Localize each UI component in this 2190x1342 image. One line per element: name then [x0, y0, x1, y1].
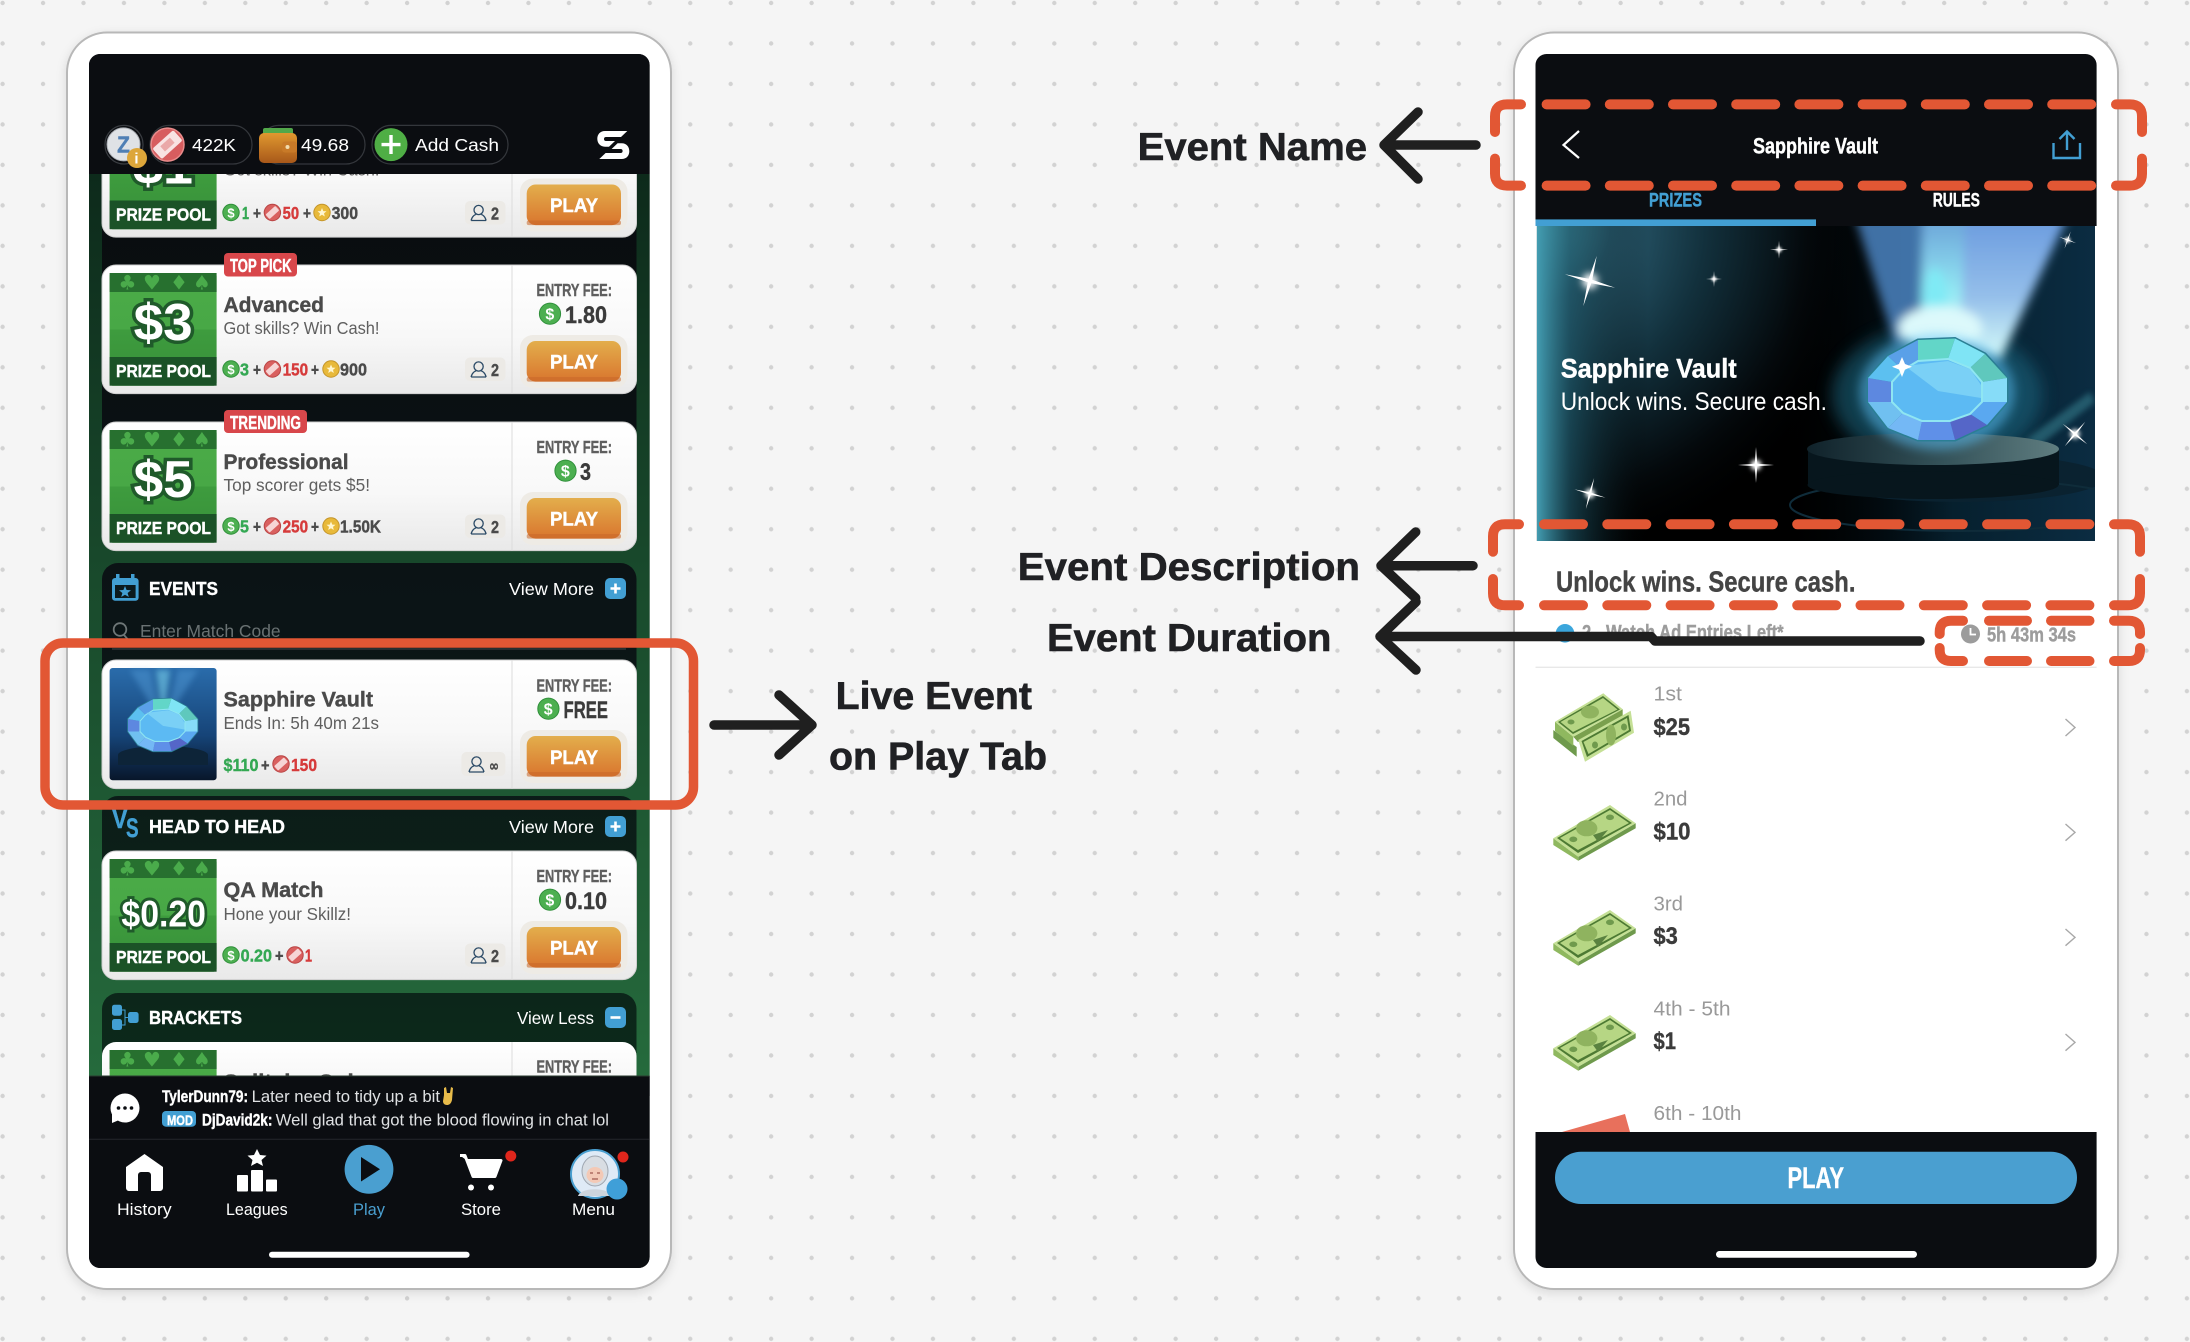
card: Advanced match: 1.80	[565, 302, 607, 329]
card: Sapphire Vault live event: ∞	[489, 757, 499, 775]
card: Professional match: +	[311, 518, 319, 537]
footer bar with play button: PLAY	[1788, 1162, 1844, 1195]
heading: events section: EVENTS	[149, 579, 218, 599]
card: Professional match: Top scorer gets $5!	[224, 475, 370, 495]
card: Advanced match: 900	[340, 360, 367, 380]
heading: brackets section	[112, 1005, 626, 1030]
card: Advanced match: ♣♥♦♠	[118, 270, 211, 294]
prize row: 4th to 5th: 4th - 5th	[1654, 998, 1730, 1020]
card: QA Match: $	[227, 948, 235, 963]
sparkles	[1558, 228, 2098, 513]
icon: share	[2054, 132, 2080, 158]
icon: skill coin: i	[134, 150, 139, 168]
card: one dollar match: 2	[491, 204, 499, 224]
card: QA Match: ENTRY FEE:	[536, 866, 612, 886]
match code search field	[112, 621, 626, 649]
nav item: Play: Play	[353, 1200, 385, 1219]
card: Advanced match: 150	[283, 360, 308, 380]
watch ad entries note: 2 - Watch Ad Entries Left*	[1582, 622, 1784, 644]
card: one dollar match: +	[253, 204, 261, 223]
card: bracket match, cut off: ENTRY FEE:	[536, 1057, 612, 1077]
arrow: to live event card label	[714, 695, 812, 755]
card: Advanced match: $	[227, 362, 235, 377]
card: Professional match	[102, 422, 636, 551]
hero banner: Sapphire Vault	[1561, 353, 1737, 383]
card: Sapphire Vault live event: Ends In: 5h 40m 21s	[224, 713, 379, 733]
nav item: Menu with avatar: Menu	[572, 1200, 615, 1219]
card: one dollar match: $1	[133, 138, 193, 196]
card: Professional match: $	[561, 464, 570, 481]
icon: chat bubble	[110, 1094, 140, 1123]
heading: brackets section: BRACKETS	[149, 1008, 242, 1028]
nav item: Leagues	[226, 1149, 288, 1219]
highlight box: event description	[1493, 524, 2140, 605]
card: Professional match: ENTRY FEE:	[536, 437, 612, 457]
prize row: 6th to 10th	[1562, 1103, 1742, 1132]
card: Professional match: 3	[580, 459, 591, 486]
icon: back chevron	[1564, 131, 1579, 158]
nav item: History	[117, 1154, 172, 1219]
prize row: 2nd: 2nd	[1654, 789, 1688, 811]
heading: events section	[112, 574, 626, 601]
chat message one: TylerDunn79:	[162, 1088, 248, 1106]
heading: head to head section: View More	[509, 817, 594, 837]
top status bar: 422K	[192, 135, 236, 155]
highlight box: event name	[1495, 104, 2142, 186]
card: Sapphire Vault live event: FREE	[564, 697, 608, 724]
chat message one: Later need to tidy up a bit	[252, 1088, 440, 1106]
icon: wallet	[259, 128, 297, 163]
highlight box: live event card	[45, 643, 694, 805]
card: bracket match, cut off: Solitaire Cube	[224, 1069, 374, 1094]
card: one dollar match: 300	[332, 203, 358, 223]
card: one dollar match: +	[303, 204, 311, 223]
top status bar: 49.68	[301, 135, 349, 155]
hero banner	[1537, 216, 2130, 541]
card: bracket match, cut off	[102, 1042, 636, 1110]
card: Professional match: ♣♥♦♠	[118, 428, 211, 452]
event duration timer: 5h 43m 34s	[1987, 624, 2076, 646]
card: bracket match, cut off: ♣♥♦♠	[118, 1048, 211, 1072]
prize row: 1st: 1st	[1654, 684, 1682, 706]
nav item: History: History	[117, 1200, 172, 1219]
arrow: event duration	[1380, 602, 1920, 670]
card: Advanced match: +	[311, 361, 319, 380]
chat message two: MOD	[167, 1113, 193, 1128]
card: QA Match: 1	[305, 946, 312, 966]
podium	[1790, 433, 2130, 531]
icon: skill coin: Z	[117, 132, 130, 158]
chat message two: DjDavid2k:	[202, 1112, 272, 1130]
top status bar	[89, 54, 650, 174]
chat message two: Well glad that got the blood flowing in chat lol	[276, 1112, 609, 1130]
nav item: Leagues: Leagues	[226, 1200, 288, 1219]
icon: skill coin	[107, 128, 147, 168]
event thumbnail	[110, 668, 217, 780]
card: QA Match: QA Match	[224, 877, 324, 902]
card: QA Match: 2	[491, 946, 499, 966]
card: Sapphire Vault live event: ENTRY FEE:	[536, 676, 612, 696]
card: Advanced match: PLAY	[550, 352, 598, 374]
prize row: 1st	[1553, 684, 2075, 762]
badge: trending	[224, 410, 307, 433]
card: QA Match: $	[545, 893, 554, 910]
card: Professional match: Professional	[224, 449, 348, 474]
prize row: 4th to 5th: $1	[1654, 1028, 1676, 1055]
heading: head to head section: S	[126, 813, 139, 843]
nav item: Menu with avatar	[571, 1150, 628, 1219]
prize row: 2nd	[1553, 789, 2075, 861]
prize row: 2nd: $10	[1654, 818, 1690, 845]
prize row: 3rd: $3	[1654, 923, 1678, 950]
arrow: event description	[1381, 532, 1473, 598]
card: QA Match: Hone your Skillz!	[224, 904, 351, 924]
heading: head to head section: HEAD TO HEAD	[149, 817, 285, 837]
card: one dollar match: 1	[242, 203, 249, 223]
hero banner: Unlock wins. Secure cash.	[1561, 388, 1827, 416]
card: Advanced match: ENTRY FEE:	[536, 280, 612, 300]
event header bar	[1536, 54, 2097, 226]
event description text: Unlock wins. Secure cash.	[1556, 567, 1856, 599]
card: Professional match: 5	[240, 517, 249, 537]
card: Advanced match: Advanced	[224, 292, 324, 317]
arrow: event name	[1384, 112, 1476, 179]
card: Sapphire Vault live event: Sapphire Vault	[224, 687, 373, 712]
match code search field: Enter Match Code	[140, 621, 281, 641]
card: Professional match: $5	[134, 451, 193, 509]
chat message one	[162, 1087, 453, 1106]
card: Sapphire Vault live event: PLAY	[550, 747, 598, 769]
label: live event on play tab: on Play Tab	[829, 736, 1047, 778]
card: Advanced match: PRIZE POOL	[116, 361, 211, 381]
heading: head to head section	[112, 804, 626, 843]
card: QA Match: 0.20	[241, 946, 272, 966]
card: Professional match: PRIZE POOL	[116, 518, 211, 538]
event header bar: PRIZES	[1649, 191, 1702, 212]
heading: brackets section: View Less	[517, 1008, 594, 1028]
card: Sapphire Vault live event: $	[544, 702, 553, 719]
card: Advanced match: 3	[240, 360, 249, 380]
card: Advanced match: Got skills? Win Cash!	[224, 318, 380, 338]
card: Sapphire Vault live event: +	[261, 756, 270, 775]
nav item: Play	[345, 1145, 393, 1219]
icon: ticket coin	[151, 128, 184, 161]
footer bar with play button	[1536, 1132, 2097, 1268]
icon: add cash plus	[374, 128, 408, 161]
card: Advanced match	[102, 265, 636, 394]
prize row: 3rd: 3rd	[1654, 894, 1683, 916]
card: one dollar match	[102, 108, 636, 237]
card: QA Match: PLAY	[550, 938, 598, 960]
card: Professional match: 2	[491, 517, 499, 537]
heading: events section: View More	[509, 579, 594, 599]
event duration timer	[1961, 624, 2076, 646]
card: one dollar match: $	[227, 206, 235, 220]
prize row: 4th to 5th	[1553, 998, 2075, 1071]
card: Sapphire Vault live event	[102, 660, 636, 789]
card: QA Match	[102, 851, 636, 980]
label: event description: Event Description	[1018, 546, 1360, 589]
card: one dollar match: PRIZE POOL	[116, 204, 211, 224]
card: Sapphire Vault live event: $110	[224, 755, 259, 775]
card: Advanced match: $3	[134, 294, 193, 352]
card: Advanced match: 2	[491, 360, 499, 380]
card: QA Match: ♣♥♦♠	[118, 856, 211, 880]
prize row: 6th to 10th: 6th - 10th	[1654, 1103, 1742, 1125]
card: one dollar match: PLAY	[550, 195, 598, 217]
prize row: 1st: $25	[1654, 714, 1690, 741]
card: Professional match: 1.50K	[340, 517, 381, 537]
chat and navigation bar	[89, 1076, 650, 1268]
card: one dollar match: Got skills? Win Cash!	[224, 160, 380, 180]
card: QA Match: PRIZE POOL	[116, 947, 211, 967]
card: Professional match: +	[253, 518, 261, 537]
badge: top pick	[224, 253, 297, 276]
nav item: Store: Store	[461, 1200, 501, 1219]
heading: head to head section: V	[112, 804, 128, 834]
card: one dollar match: 50	[283, 203, 299, 223]
card: Professional match: 250	[283, 517, 308, 537]
badge: top pick: TOP PICK	[230, 256, 292, 276]
prize row: 3rd	[1553, 894, 2075, 966]
panel: left phone, Play tab	[67, 32, 671, 1289]
label: event name: Event Name	[1138, 126, 1367, 169]
label: event duration: Event Duration	[1047, 617, 1332, 660]
badge: trending: TRENDING	[230, 413, 301, 433]
card: QA Match: 0.10	[565, 888, 607, 915]
label: live event on play tab: Live Event	[836, 675, 1032, 718]
panel: right phone, event details	[1514, 32, 2130, 1289]
card: QA Match: +	[275, 947, 284, 966]
highlight box: event duration	[1940, 621, 2140, 661]
card: Advanced match: +	[253, 361, 261, 380]
icon: skillz logo	[597, 131, 629, 159]
card: Sapphire Vault live event: 150	[291, 755, 317, 775]
event header bar: RULES	[1933, 191, 1980, 212]
card: Professional match: $	[227, 519, 235, 534]
event header bar: Sapphire Vault	[1753, 134, 1879, 159]
top status bar: Add Cash	[415, 135, 499, 155]
card: Advanced match: $	[545, 307, 554, 324]
nav item: Store	[460, 1150, 516, 1219]
card: QA Match: $0.20	[121, 894, 206, 935]
label: live event on play tab	[829, 675, 1047, 778]
card: Professional match: PLAY	[550, 508, 598, 530]
